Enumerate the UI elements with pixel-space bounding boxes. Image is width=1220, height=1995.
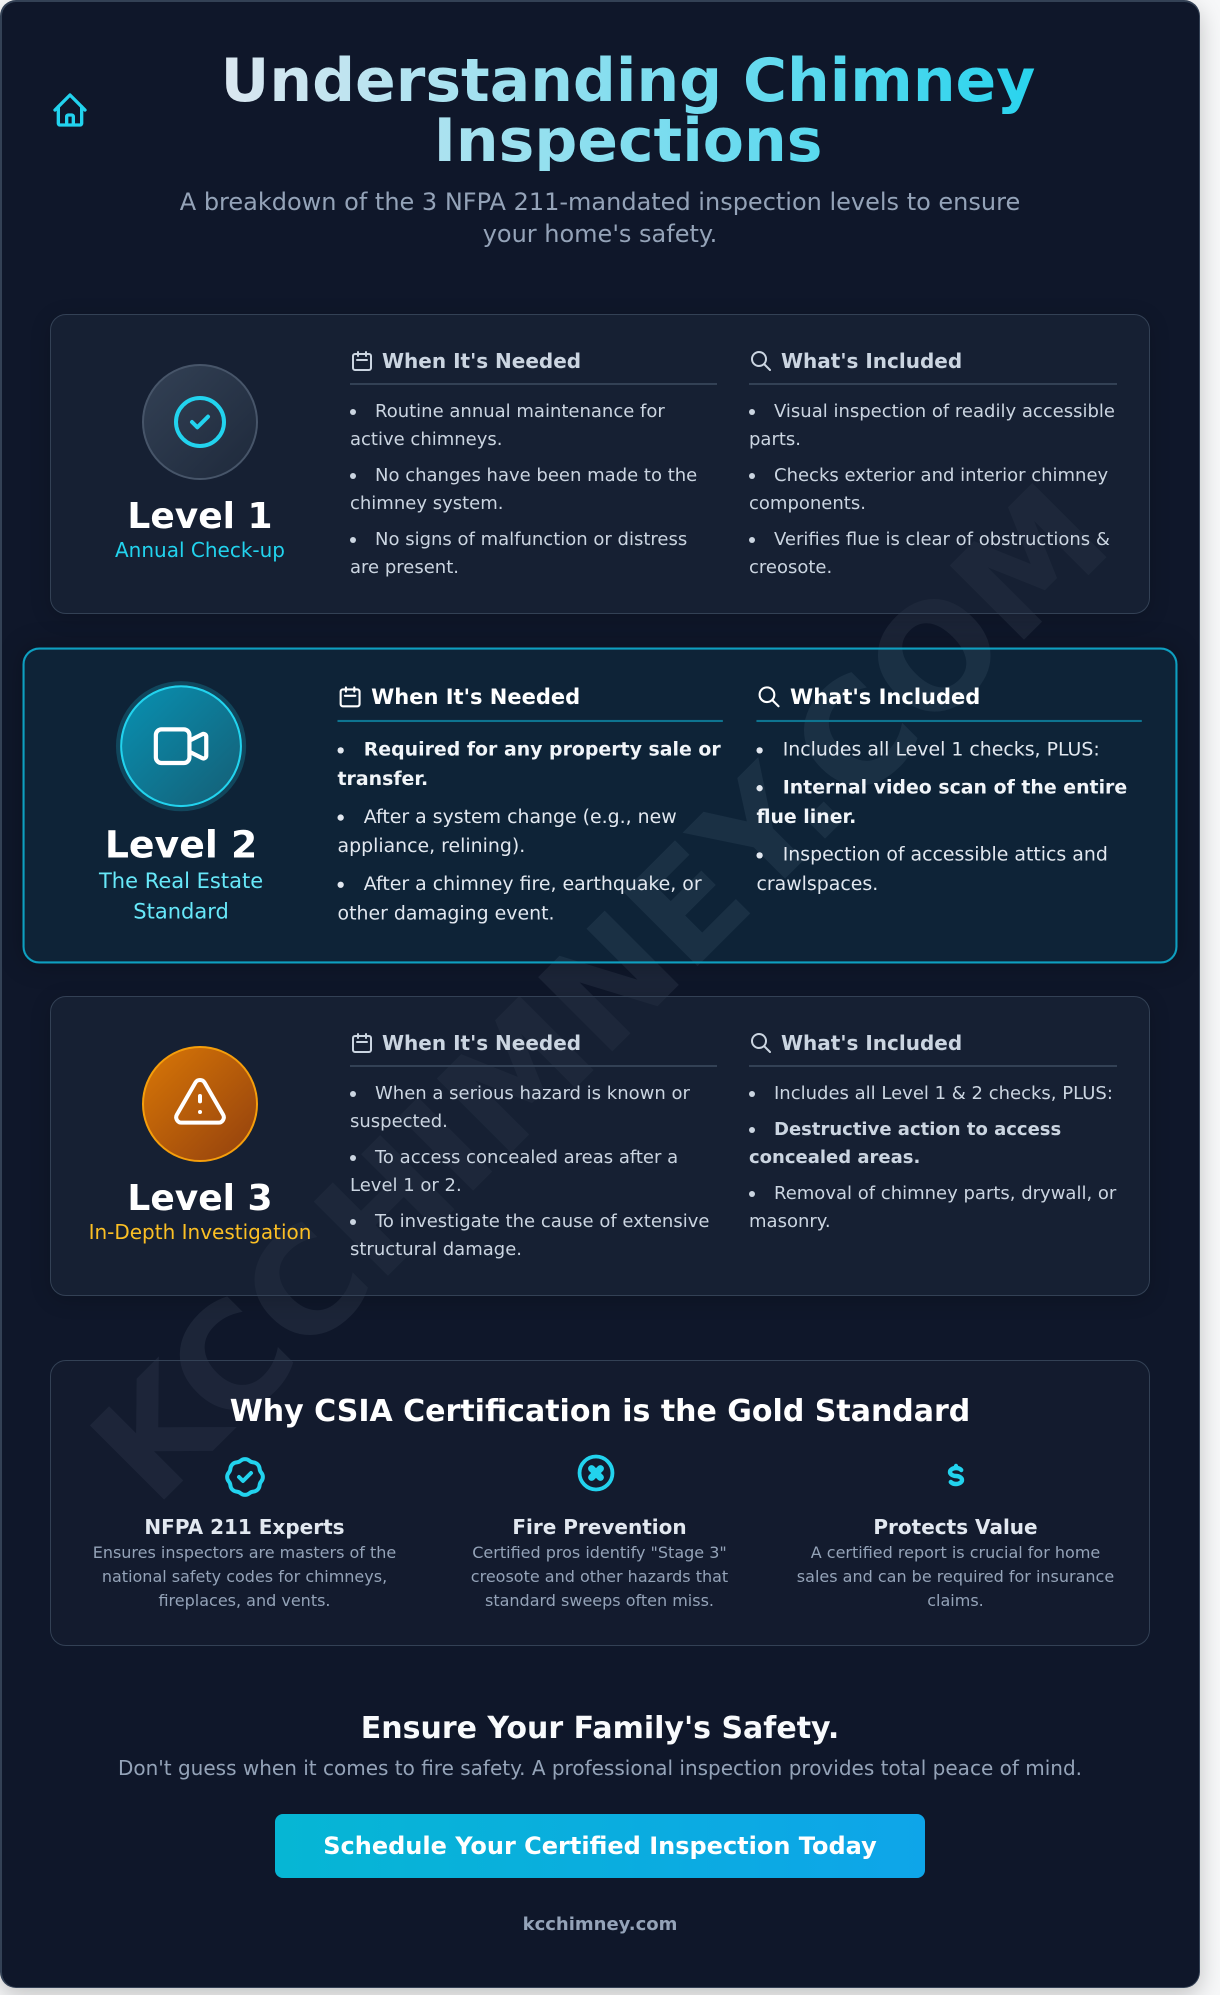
level 3 what's included [749,1031,1117,1232]
level 2 tagline [98,868,263,923]
subtitle: A breakdown of the 3 NFPA 211-mandated inspection levels to ensure [180,188,1020,216]
subtitle: your home's safety. [483,220,717,248]
list: included [749,401,1115,578]
level 3 heading: Level 3 [127,1178,273,1219]
heading: included [749,339,1117,385]
level 3 tagline: In-Depth Investigation [89,1220,311,1244]
level 2 heading: Level 2 [105,824,257,867]
level 2 badge and name [98,681,263,923]
level 1 tagline: Annual Check-up [115,538,285,562]
panel: CSIA certification [50,1360,1150,1646]
icon: home [53,93,87,127]
level 1 heading: Level 1 [127,496,273,537]
level 1 when needed [350,349,717,578]
benefit description: Ensures inspectors are masters of the national safety codes for chimneys, fireplaces, and vents. [93,1543,396,1610]
benefit description: A certified report is crucial for home sales and can be required for insurance claims. [797,1543,1114,1610]
list: included: Visual inspection of readily accessible parts. [749,401,1115,450]
list: included: Includes all Level 1 checks, PLUS: [783,738,1100,760]
watermark: KCCHIMNEY.COM [60,453,1140,1533]
list: when needed: No signs of malfunction or distress are present. [350,529,687,578]
list: included: Includes all Level 1 & 2 checks, PLUS: [774,1083,1113,1104]
benefit title: Protects Value [873,1515,1038,1539]
heading: included: What's Included [790,684,980,709]
level 3 badge and name [89,1046,311,1244]
benefit title: Fire Prevention [512,1515,687,1539]
benefit description: Certified pros identify "Stage 3" creosote and other hazards that standard sweeps often miss. [471,1543,728,1610]
heading: included [749,1021,1117,1067]
icon: warning triangle [142,1046,258,1162]
heading: when needed: When It's Needed [382,349,581,373]
icon: check circle [142,364,258,480]
list: when needed: When a serious hazard is known or suspected. [350,1083,690,1132]
icon: video camera [120,685,242,807]
icon: dollar sign [948,1464,964,1486]
benefit: protects value [797,1464,1114,1610]
panel: level 1 [50,314,1150,614]
list: included: Inspection of accessible attics and crawlspaces. [756,843,1108,895]
level 1 what's included [749,349,1117,578]
section heading: Why CSIA Certification is the Gold Standard [230,1394,970,1429]
level 2 tagline: The Real Estate [99,868,263,893]
footer url: kcchimney.com [523,1914,677,1935]
list: when needed: Routine annual maintenance for active chimneys. [350,401,665,450]
list: when needed: After a system change (e.g., new appliance, relining). [338,806,677,857]
list: included: Removal of chimney parts, drywall, or masonry. [749,1183,1116,1232]
level 2 what's included [756,684,1142,895]
title: Understanding Chimney [221,46,1035,116]
icon: badge check [225,1457,265,1497]
list: included: Verifies flue is clear of obstructions & creosote. [749,529,1110,578]
icon: circled x [578,1454,614,1492]
list: included: Destructive action to access concealed areas. [749,1119,1061,1168]
heading: when needed: When It's Needed [382,1031,581,1055]
heading: included: What's Included [781,349,962,373]
panel: level 3 [50,996,1150,1296]
title: Inspections [434,106,822,176]
list: when needed: To access concealed areas after a Level 1 or 2. [350,1147,678,1196]
heading: when needed [350,339,717,385]
panel: level 2 [22,647,1178,963]
CTA text: Don't guess when it comes to fire safety. A professional inspection provides total peace of mind. [118,1756,1082,1780]
benefit title: NFPA 211 Experts [144,1515,345,1539]
list: when needed [350,1083,709,1260]
heading: included: What's Included [781,1031,962,1055]
title [190,51,1066,171]
list: when needed: No changes have been made to the chimney system. [350,465,697,514]
list: included [749,1083,1116,1232]
list: included: Checks exterior and interior chimney components. [749,465,1108,514]
heading: included [756,673,1142,722]
level 2 tagline: Standard [133,897,229,923]
list: included [756,738,1127,895]
level 1 badge and name [115,364,285,562]
level 3 when needed [350,1031,717,1260]
list: when needed: Required for any property sale or transfer. [338,738,721,790]
benefit: NFPA 211 experts [93,1457,396,1610]
list: when needed [350,401,697,578]
heading: when needed [350,1021,717,1067]
CTA button [275,1814,925,1878]
level 2 when needed [338,684,723,924]
CTA button: Schedule Your Certified Inspection Today [323,1832,877,1860]
heading: when needed: When It's Needed [371,684,580,709]
heading: when needed [338,673,723,722]
list: when needed: After a chimney fire, earthquake, or other damaging event. [338,873,702,924]
benefit: fire prevention [471,1454,728,1610]
list: included: Internal video scan of the entire flue liner. [756,776,1127,828]
subtitle [180,188,1020,248]
list: when needed: To investigate the cause of extensive structural damage. [350,1211,709,1260]
CTA heading: Ensure Your Family's Safety. [361,1711,839,1746]
call to action [118,1711,1082,1935]
list: when needed [338,738,721,924]
